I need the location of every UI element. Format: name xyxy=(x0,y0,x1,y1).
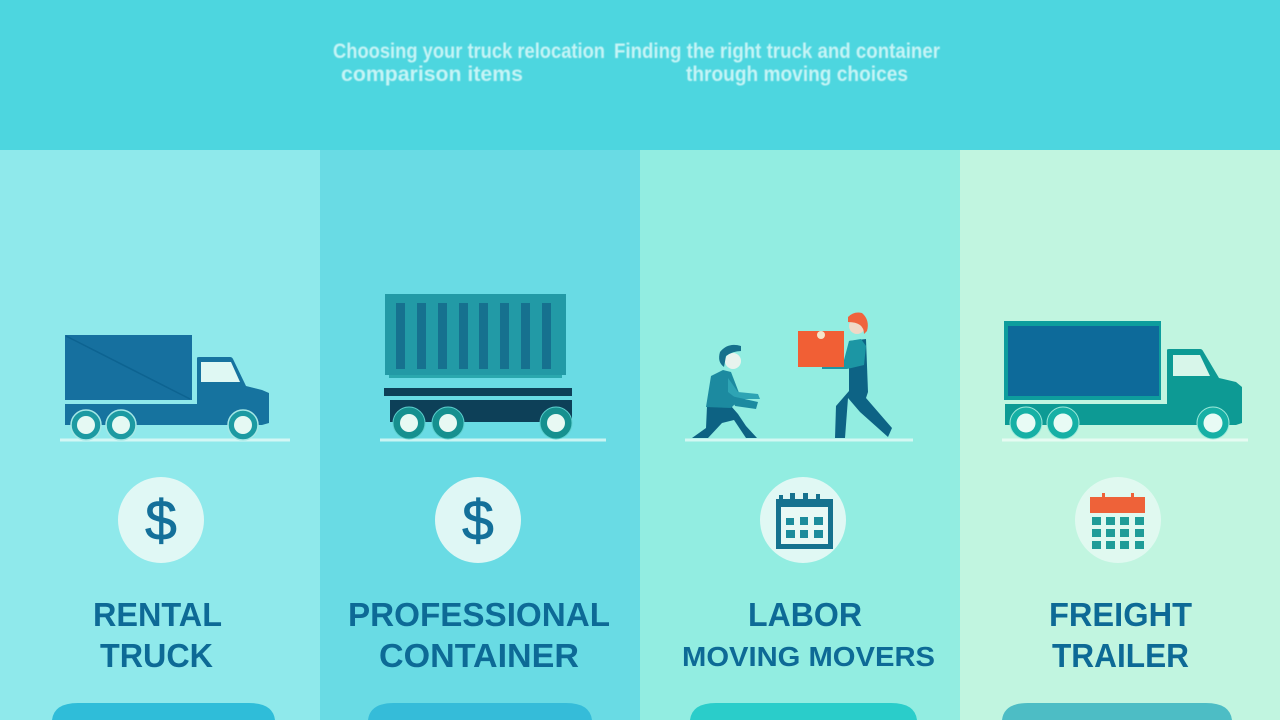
icon: calendar badge xyxy=(760,477,846,563)
icon: dollar badge: $ xyxy=(462,489,494,553)
panel: professional container xyxy=(320,150,640,720)
label: freight trailer xyxy=(1049,596,1192,674)
label: freight trailer: FREIGHT xyxy=(1049,596,1192,633)
header intro text: comparison items xyxy=(341,63,523,86)
label: professional container xyxy=(348,596,610,674)
panel: rental truck xyxy=(0,150,320,720)
header band xyxy=(0,0,1280,150)
label: rental truck xyxy=(93,596,222,674)
panel: labor moving movers xyxy=(640,150,960,720)
icon: container on trailer xyxy=(380,294,606,442)
panel: freight trailer xyxy=(960,150,1280,720)
header intro text: Finding the right truck and container xyxy=(614,40,940,63)
label: professional container: CONTAINER xyxy=(379,637,579,674)
icon: dollar badge xyxy=(435,477,521,563)
figure: left mover xyxy=(692,345,760,438)
icon: freight truck xyxy=(1002,321,1248,442)
button xyxy=(52,703,275,720)
label: labor moving movers: MOVING MOVERS xyxy=(682,641,935,672)
label: freight trailer: TRAILER xyxy=(1052,637,1189,674)
button xyxy=(690,703,917,720)
button xyxy=(1002,703,1232,720)
icon: rental truck xyxy=(60,335,290,442)
label: rental truck: TRUCK xyxy=(100,637,213,674)
figure: right mover with box xyxy=(798,312,892,438)
label: labor moving movers xyxy=(682,596,935,672)
icon: two movers with box xyxy=(685,312,913,442)
header intro text: through moving choices xyxy=(686,63,908,86)
label: rental truck: RENTAL xyxy=(93,596,222,633)
header intro text xyxy=(333,40,940,86)
header intro text: Choosing your truck relocation xyxy=(333,40,605,63)
button xyxy=(368,703,592,720)
label: professional container: PROFESSIONAL xyxy=(348,596,610,633)
icon: dollar badge xyxy=(118,477,204,563)
label: labor moving movers: LABOR xyxy=(748,596,862,633)
icon: dollar badge: $ xyxy=(145,489,177,553)
icon: orange calendar badge xyxy=(1075,477,1161,563)
